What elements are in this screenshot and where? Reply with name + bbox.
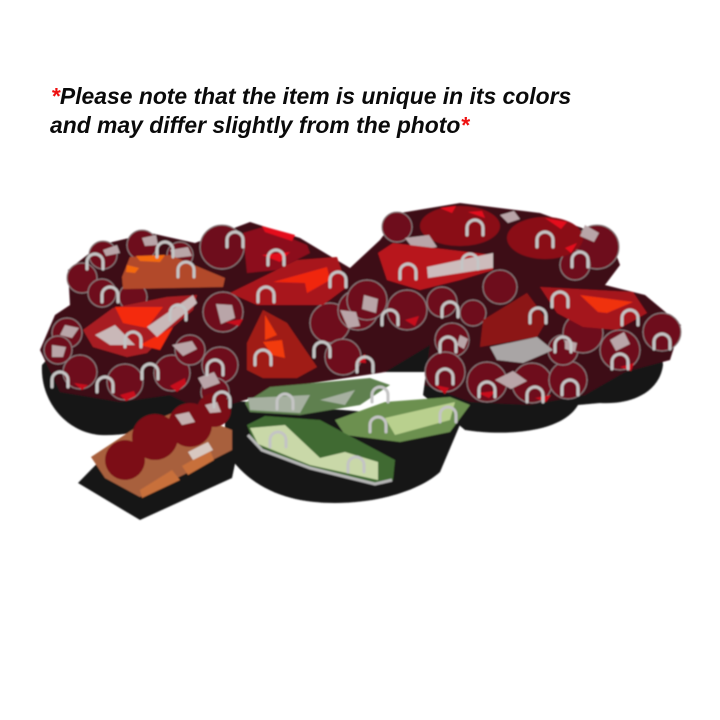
green stone 2 reflection (385, 402, 455, 435)
stone body (122, 255, 225, 289)
note line 2: and may differ slightly from the photo* (50, 112, 470, 138)
green stone 3 silver rim (248, 435, 392, 484)
stone body (83, 295, 197, 357)
felt stem (78, 440, 240, 520)
silver facets (175, 402, 221, 425)
green stone 2 (335, 397, 470, 442)
brown bead bar with red stones (91, 393, 232, 498)
silver prong rings (52, 220, 670, 472)
top center stone (243, 226, 310, 273)
orange beads (140, 450, 214, 498)
stone body (230, 257, 347, 305)
right felt lobe (423, 335, 663, 433)
green stone 3 pale reflection (250, 425, 378, 480)
silver reflection (427, 253, 493, 278)
stone body (243, 227, 310, 273)
right heart stone (480, 293, 553, 363)
round stones (44, 212, 681, 406)
green stone 3 (247, 416, 395, 484)
green stone 1 reflection (248, 390, 355, 413)
middle felt (340, 330, 432, 372)
orange highlight (580, 295, 633, 313)
red highlight (262, 226, 295, 262)
right top stones (405, 206, 599, 259)
red-orange highlight (115, 307, 173, 350)
orange highlight (126, 255, 165, 273)
silver base (490, 337, 553, 363)
top stone B (507, 217, 583, 259)
center large teardrop stone (230, 257, 347, 305)
red stones (105, 393, 231, 480)
stone body (378, 243, 493, 290)
note text (50, 83, 571, 138)
silver reflection (95, 295, 197, 345)
center felt lobe (225, 400, 462, 503)
silver facets (405, 211, 599, 251)
orange highlight (263, 315, 285, 358)
note line 1: *Please note that the item is unique in its colors (51, 83, 571, 109)
red sparkles (440, 206, 577, 253)
orange teardrop stone (122, 255, 225, 289)
maroon underlay of gem cluster (40, 203, 681, 412)
red-orange highlight (273, 267, 330, 293)
left main teardrop stone (83, 295, 197, 357)
pale bead (188, 442, 213, 460)
right large teardrop stone (540, 287, 647, 330)
green stones (245, 378, 470, 484)
center triangular stone (247, 310, 317, 378)
stone body (247, 310, 317, 378)
stone body (480, 293, 547, 347)
bright red sparkles on round stones (74, 316, 634, 402)
right long rectangular stone (378, 243, 493, 290)
product photo: jewelled patch (40, 203, 681, 520)
stone body (540, 287, 647, 330)
left felt lobe (42, 345, 235, 435)
black felt backing (42, 330, 663, 520)
silver facets on round stones (52, 235, 630, 389)
green stone 1 (245, 378, 390, 415)
top stone A (420, 206, 500, 246)
bead base (91, 410, 232, 497)
